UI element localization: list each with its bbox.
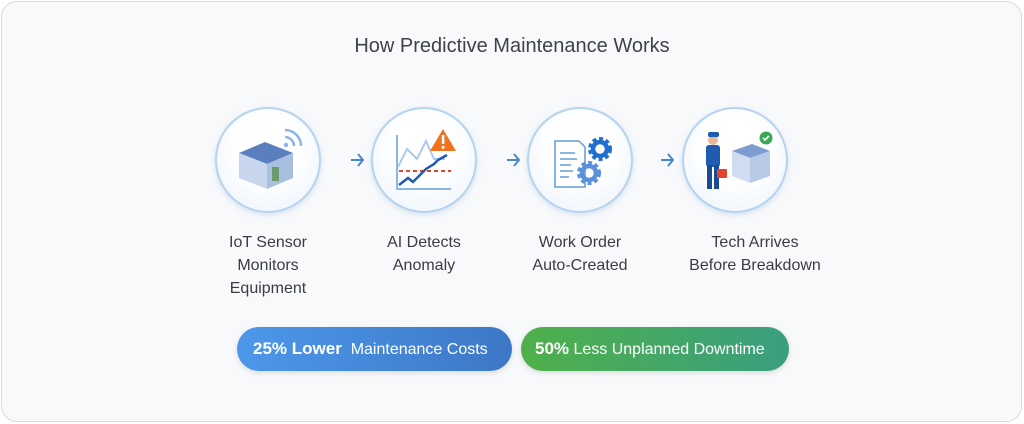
label 4	[689, 234, 821, 274]
label 4: Tech Arrives	[711, 234, 799, 251]
label 1: Equipment	[230, 280, 306, 297]
pill: downtime stat: 50% Less Unplanned Downtime	[535, 339, 765, 358]
pill: cost stat: 25% Lower Maintenance Costs	[253, 339, 488, 358]
step 3 icon: work order gears	[527, 107, 633, 213]
pill: cost stat	[237, 327, 512, 371]
label 3: Work Order	[539, 234, 621, 251]
arrow 1	[351, 153, 364, 167]
label 2: AI Detects	[387, 234, 461, 251]
label 2: Anomaly	[393, 257, 455, 274]
label 1: Monitors	[237, 257, 299, 274]
step 1 icon: IoT sensor	[215, 107, 321, 213]
arrow 3	[661, 153, 674, 167]
step 2 icon: AI chart	[371, 107, 477, 213]
label 4: Before Breakdown	[689, 257, 821, 274]
pill: downtime stat	[521, 327, 789, 371]
label 3	[532, 234, 628, 274]
label 1	[229, 234, 307, 297]
arrow 2	[507, 153, 520, 167]
label 1: IoT Sensor	[229, 234, 307, 251]
title: How Predictive Maintenance Works	[354, 35, 670, 57]
label 3: Auto-Created	[532, 257, 628, 274]
step 4 icon: technician	[682, 107, 788, 213]
label 2	[387, 234, 461, 274]
